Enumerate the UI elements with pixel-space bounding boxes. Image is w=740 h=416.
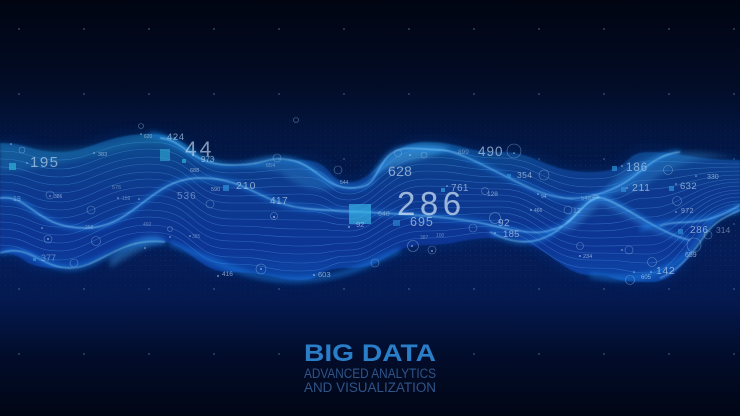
floating data numbers: 314 [716,225,730,235]
floating data numbers: 258 [85,225,94,231]
floating data numbers: 424 [167,132,185,143]
floating data numbers: 590 [211,187,220,193]
floating data numbers: 210 [236,180,257,192]
floating data numbers: 654 [266,163,275,169]
floating data numbers: 466 [534,208,543,214]
floating data numbers: 576 [112,185,121,191]
floating data numbers: 544 [340,180,349,186]
floating data numbers: 211 [632,182,651,194]
ridge glow [0,134,740,280]
floating data numbers: 695 [410,215,434,229]
wave band [0,134,740,282]
floating data numbers: 128 [487,191,498,198]
floating data numbers: 761 [451,183,469,194]
data circles [19,118,712,284]
floating data numbers: 186 [626,162,648,174]
floating data numbers: 386 [54,194,63,200]
scattered data points [10,133,697,277]
floating data numbers: 92 [356,220,364,229]
floating data numbers: 385 [192,234,201,240]
floating data numbers: 100 [436,233,445,239]
floating data numbers: 659 [685,252,697,259]
floating data numbers: 632 [680,181,697,192]
floating data numbers: 640 [378,211,390,218]
floating data numbers: 12 [573,208,581,215]
floating data numbers: 548 [581,196,592,202]
floating data numbers: 387 [420,235,429,241]
subtitle [304,366,436,395]
floating data numbers: 159 [122,196,131,202]
subtitle: AND VISUALIZATION [304,380,436,395]
floating data numbers: 416 [222,271,233,278]
wave lines [0,142,740,273]
highlights: light ribbon sections [0,134,735,268]
floating data numbers: 536 [177,191,197,202]
floating data numbers: 377 [41,253,56,263]
floating data numbers: 490 [478,144,504,159]
floating data numbers: 94 [541,194,547,200]
floating data numbers: 185 [503,229,520,240]
floating data numbers: 972 [681,208,694,215]
floating data numbers: 492 [143,222,152,228]
floating data numbers: 354 [517,170,532,180]
title: BIG DATA: BIG DATA [304,340,436,367]
floating data numbers: 286 [397,185,466,222]
floating data numbers: 973 [201,155,215,164]
floating data numbers: 234 [583,254,592,260]
title: BIG DATA [304,340,436,395]
floating data numbers: 603 [318,270,331,279]
floating data numbers: 44 [185,138,214,161]
floating data numbers: 19 [13,196,21,203]
floating data numbers: 417 [270,196,288,207]
floating data numbers: 899 [458,149,469,156]
floating data numbers: 25 [592,194,599,200]
floating data numbers: 620 [144,134,153,140]
data squares [9,149,683,261]
bright wave ridges [0,134,740,280]
floating data numbers: 628 [388,163,412,179]
floating data numbers: 92 [498,218,510,229]
floating data numbers: 195 [30,154,60,171]
floating data numbers: 142 [656,265,675,277]
subtitle: ADVANCED ANALYTICS [304,366,436,381]
floating data numbers: 330 [707,174,719,181]
floating data numbers: 383 [98,152,107,158]
floating data numbers [13,132,730,281]
floating data numbers: 605 [641,275,652,281]
floating data numbers: 286 [690,225,708,236]
floating data numbers: 688 [190,168,199,174]
ridge core [0,138,740,278]
